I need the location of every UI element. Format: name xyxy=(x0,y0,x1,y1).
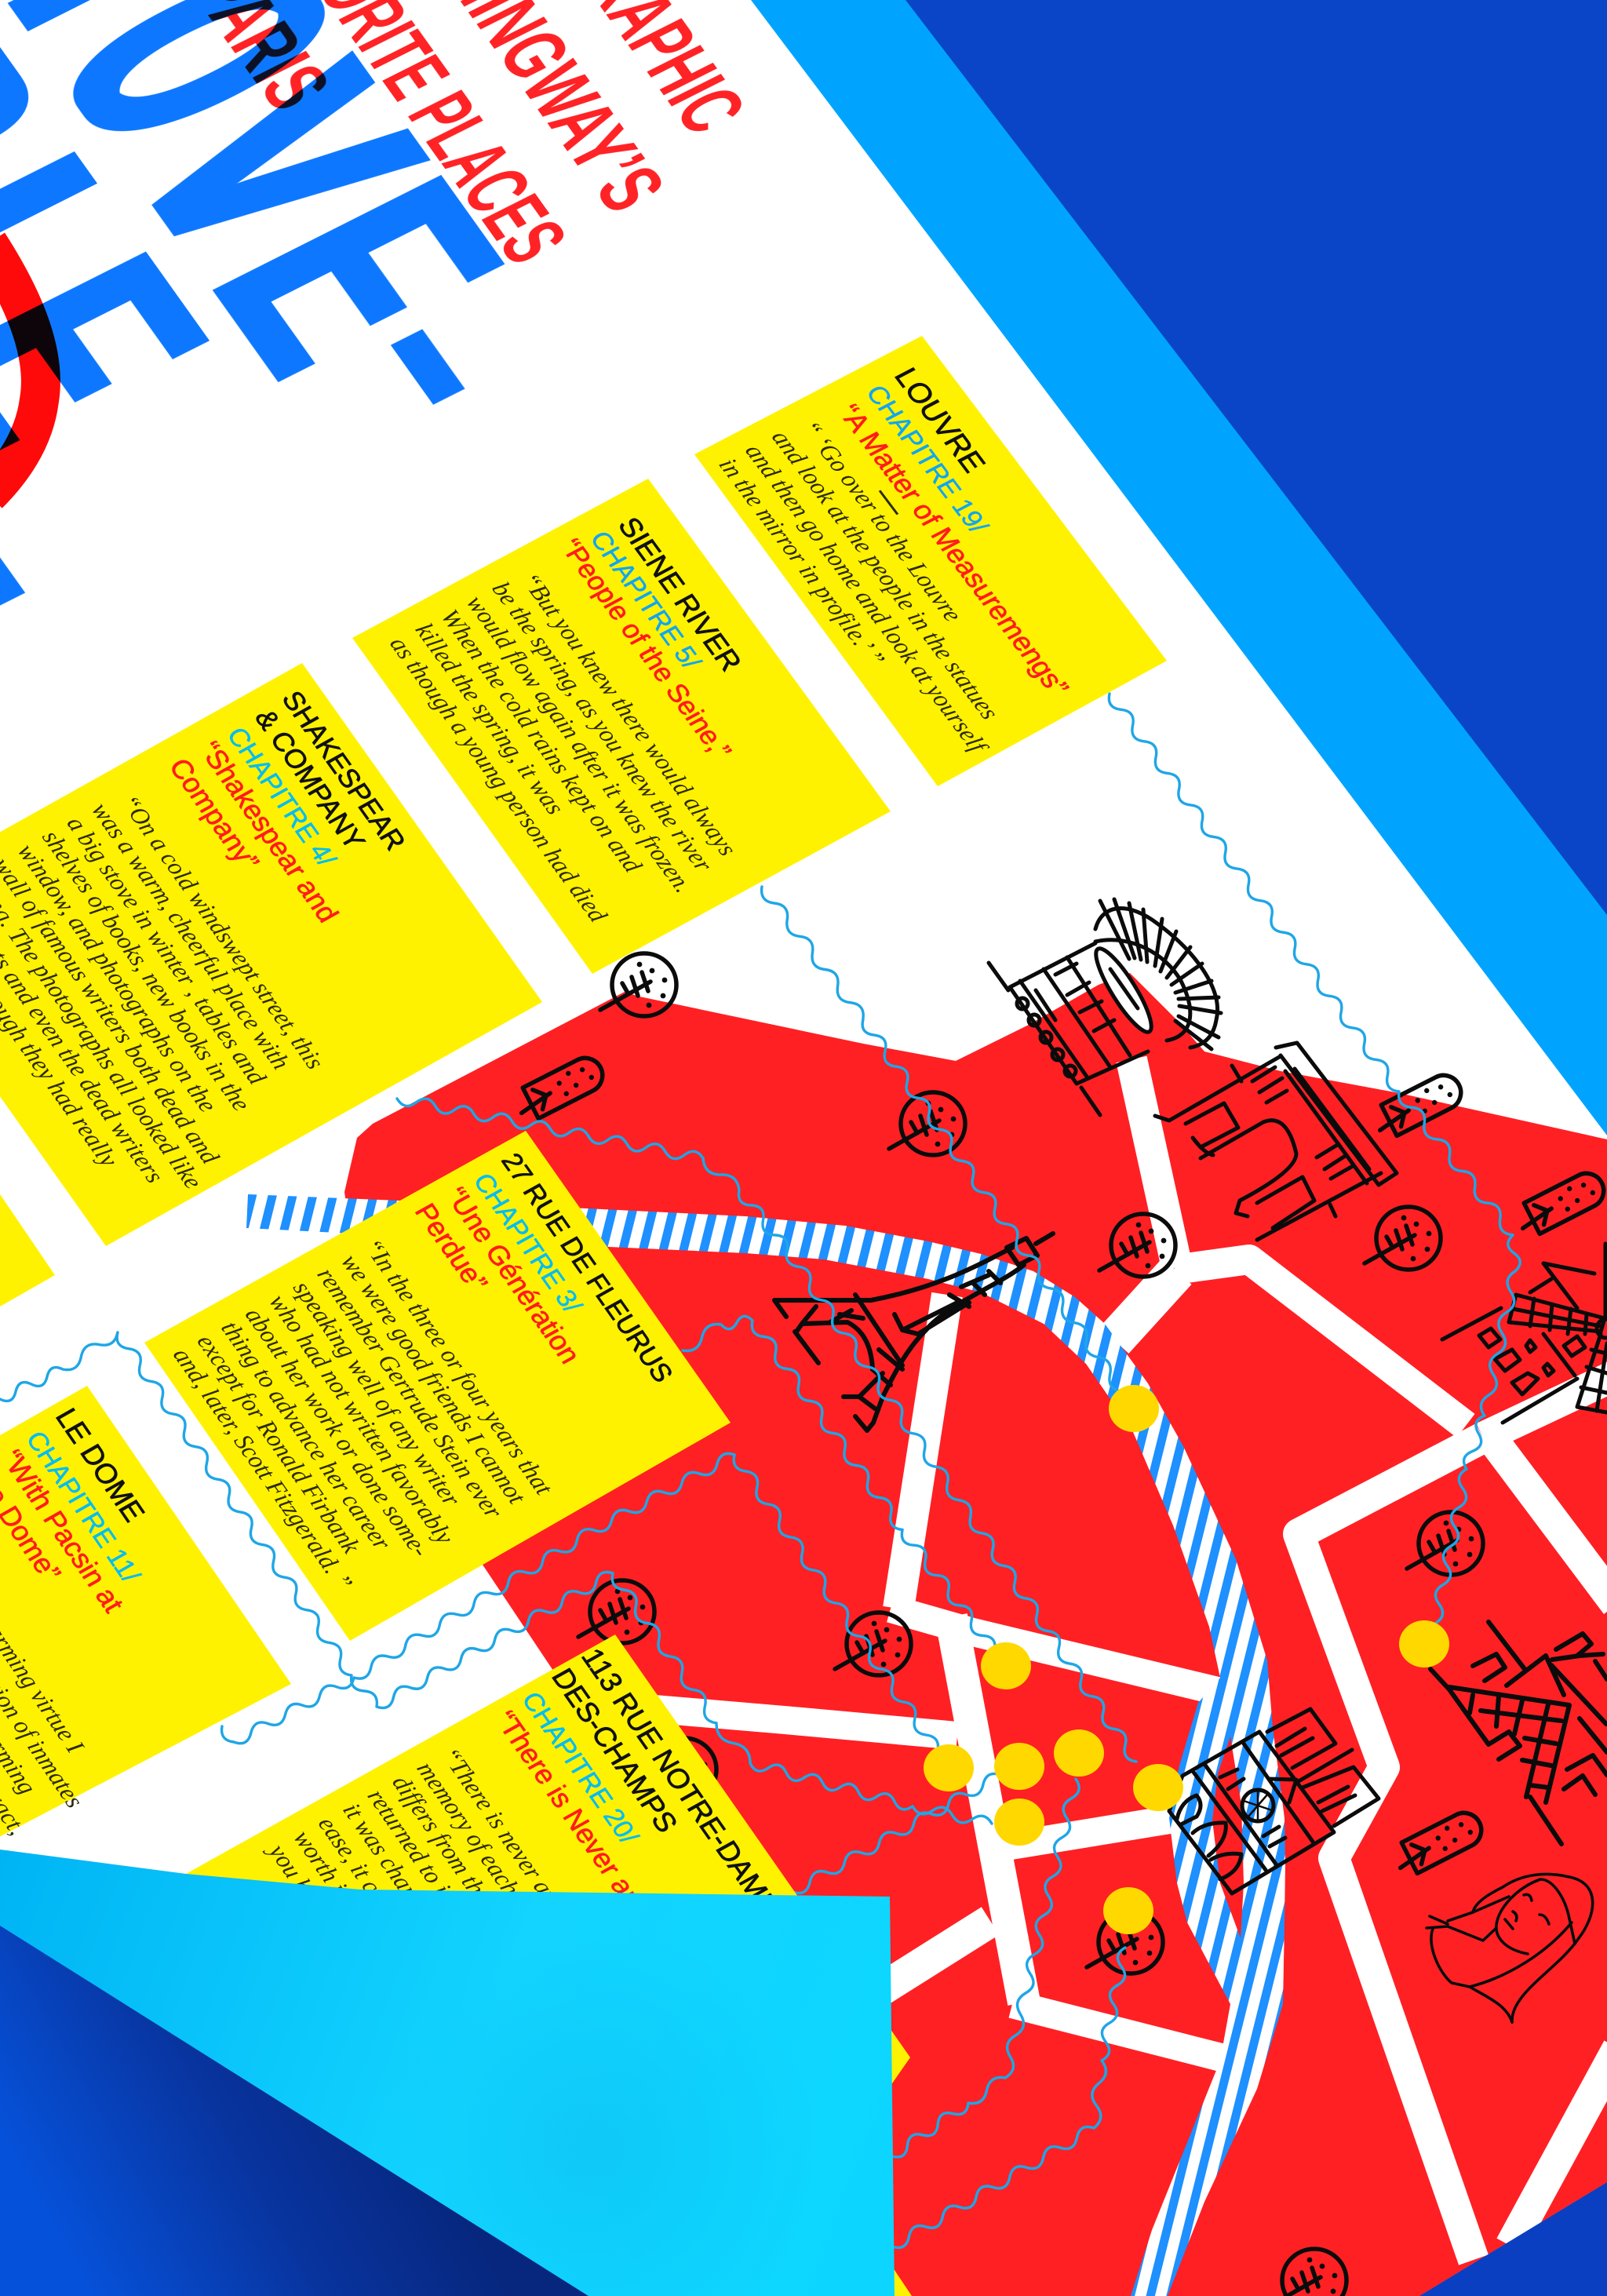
panel: Siene River: as though a young person had died xyxy=(384,632,613,927)
map: red city blocks xyxy=(344,973,1607,2296)
panel: 113 rue Notre-Dame-des-Champs: memory of each person who has lived in it xyxy=(411,1757,676,2115)
panel: Siene River: killed the spring, it was xyxy=(410,619,570,818)
map: Ile de la Cite xyxy=(1212,1737,1244,1938)
panel: 113 rue Notre-Dame-des-Champs: “There is never any end to Paris and the xyxy=(436,1744,691,2087)
map: white roads xyxy=(655,1059,1607,2260)
route: Hemingway apartment squiggle xyxy=(222,1453,949,1768)
panel: Le Dome xyxy=(0,1329,291,1853)
panel: 113 rue Notre-Dame-des-Champs xyxy=(157,1635,910,2296)
background: blue corner bottom right xyxy=(1419,2182,1607,2296)
big title: MOVE-ABLE FEAST: E xyxy=(137,133,579,419)
panel: 113 rue Notre-Dame-des-Champs: CHAPITRE 20/ xyxy=(516,1687,644,1850)
panel: Shakespear & Company: shelves of books, new books in the xyxy=(37,825,257,1115)
big title: MOVE-ABLE FEAST: V xyxy=(56,17,501,308)
panel: Siene River: “People of the Seine,” xyxy=(554,534,738,764)
panel: Louvre: “A Matter of Measuremengs” xyxy=(832,399,1076,700)
icon: Eiffel Tower xyxy=(774,1234,1053,1430)
icon: Moulin de la Galette windmill xyxy=(1442,1244,1607,1423)
route: Shakespeare and Company squiggle xyxy=(397,1099,1136,1762)
icon: Arc de Triomphe xyxy=(1155,1043,1397,1240)
panel: Louvre: and then go home and look at yourself xyxy=(740,440,994,759)
panel: 113 rue Notre-Dame-des-Champs: differs from that of any other. We always xyxy=(387,1771,639,2112)
big title: MOVE-ABLE FEAST: - xyxy=(279,247,624,464)
panel: Louvre: in the mirror in profile.’ ” xyxy=(713,454,891,670)
page curl: cyan fold xyxy=(0,1850,895,2296)
panel: 27 rue de Fleurus: “Une Génération xyxy=(439,1182,588,1368)
panel: Shakespear & Company: & COMPANY xyxy=(249,705,371,855)
map: Seine river, striped xyxy=(246,1194,1285,2296)
panel: 113 rue Notre-Dame-des-Champs: DES-CHAMPS xyxy=(545,1664,684,1838)
panel: 27 rue de Fleurus: thing to advance her career xyxy=(216,1317,397,1554)
panel: Siene River: CHAPITRE 5/ xyxy=(584,527,707,674)
panel: 27 rue de Fleurus xyxy=(144,1131,731,1641)
icons: poplar trees xyxy=(512,1052,1607,1879)
panel: 113 rue Notre-Dame-des-Champs: returned to it no matter who we were or how xyxy=(362,1784,638,2159)
panel: Shakespear & Company: “On a cold windswept street, this xyxy=(115,791,330,1073)
panel: Shakespear & Company: window, and photographs on the xyxy=(12,840,223,1117)
panel: 113 rue Notre-Dame-des-Champs: 113 RUE NOTRE-DAME- xyxy=(575,1643,791,1928)
icon: Opera house xyxy=(989,899,1221,1115)
panel: Le Dome: CHAPITRE 11/ xyxy=(20,1427,146,1588)
panel: Siene River: SIENE RIVER xyxy=(611,512,749,676)
icon: Notre-Dame xyxy=(1169,1709,1379,1893)
panel: 27 rue de Fleurus: CHAPITRE 3/ xyxy=(467,1168,588,1318)
panel: 27 rue de Fleurus: speaking well of any writer xyxy=(287,1277,467,1511)
icon: Mona Lisa xyxy=(1427,1874,1593,2022)
panel: 27 rue de Fleurus: Perdue” xyxy=(409,1198,494,1296)
route: Louvre squiggle xyxy=(1109,694,1520,1624)
panel: 113 rue Notre-Dame-des-Champs: it was changed or with what difficulties, or xyxy=(337,1799,604,2160)
poster back edge: light blue band xyxy=(0,0,1607,1177)
panel: 27 rue de Fleurus: and, later, Scott Fitzgerald. ” xyxy=(168,1343,359,1594)
panel: Louvre xyxy=(694,336,1167,786)
route: bottom squiggle to tree xyxy=(892,1948,1125,2247)
panel: Shakespear & Company: SHAKESPEAR xyxy=(275,686,412,855)
icons: round trees xyxy=(578,953,1483,2296)
panel: Siene River: When the cold rains kept on and xyxy=(435,605,648,876)
panel: Louvre: “ ‘Go over to the Louvre xyxy=(796,417,968,625)
panel: Siene River: be the spring, as you knew the river xyxy=(486,578,719,876)
route: 113 rue Notre-Dame squiggle xyxy=(793,1773,1000,1893)
panel: 27 rue de Fleurus: remember Gertrude Stein ever xyxy=(312,1263,508,1523)
panel: Siene River xyxy=(352,479,891,974)
panel: 27 rue de Fleurus: who had not written favorably xyxy=(264,1290,460,1548)
panel: Louvre: CHAPITRE 19/ xyxy=(859,381,994,538)
icon: Louvre pyramid xyxy=(1430,1622,1607,1844)
panel: Shakespear & Company: CHAPITRE 4/ xyxy=(220,723,342,872)
route: lower squiggle to dot xyxy=(892,1779,1079,2157)
subtitle lines xyxy=(234,0,785,276)
big title: MOVE-ABLE FEAST xyxy=(0,0,635,760)
panel: 27 rue de Fleurus: about her work or done some- xyxy=(239,1303,435,1562)
panel: 27 rue de Fleurus: 27 RUE DE FLEURUS xyxy=(495,1149,679,1387)
panel: Shakespear & Company: “Shakespear and xyxy=(193,736,345,928)
panel: partial box at left edge xyxy=(0,1194,55,1307)
panel: Siene River: “But you knew there would always xyxy=(516,569,742,860)
panel: Le Dome: LE DOME xyxy=(49,1403,151,1527)
panel: Shakespear & Company: a big stove in winter , tables and xyxy=(61,812,272,1089)
panel: box tip at bottom edge xyxy=(887,2258,912,2296)
panel: 27 rue de Fleurus: except for Ronald Firbank xyxy=(191,1330,366,1558)
panel: Shakespear & Company: Company” xyxy=(162,753,266,875)
red ring emblem xyxy=(0,243,41,494)
panel: Shakespear & Company: was a warm, cheerful place with xyxy=(86,798,296,1073)
panel: Louvre: LOUVRE xyxy=(887,363,992,478)
map markers: yellow dots xyxy=(924,1385,1449,1934)
panel: Louvre: and look at the people in the statues xyxy=(766,426,1005,723)
route: Seine squiggle xyxy=(762,887,1134,1409)
panel: 113 rue Notre-Dame-des-Champs: worth it and you received return for whatever xyxy=(288,1826,570,2209)
panel: 113 rue Notre-Dame-des-Champs: “There is Never any End to Paris” xyxy=(488,1706,756,2065)
panel: Siene River: would flow again after it was frozen. xyxy=(461,591,698,897)
panel: 27 rue de Fleurus: we were good friends I cannot xyxy=(336,1250,532,1509)
route: 27 rue de Fleurus squiggle xyxy=(683,1316,1006,1666)
panel: 113 rue Notre-Dame-des-Champs: ease, it could be reached. Paris was always xyxy=(312,1812,583,2179)
route: Le Dome squiggle xyxy=(0,1332,992,1824)
background: dark blue under the page curl xyxy=(0,1915,604,2296)
panel: 113 rue Notre-Dame-des-Champs: you brought to it. xyxy=(262,1838,385,1993)
panel: Shakespear & Company xyxy=(0,663,542,1246)
panel: 27 rue de Fleurus: “In the three or four years that xyxy=(359,1234,559,1500)
